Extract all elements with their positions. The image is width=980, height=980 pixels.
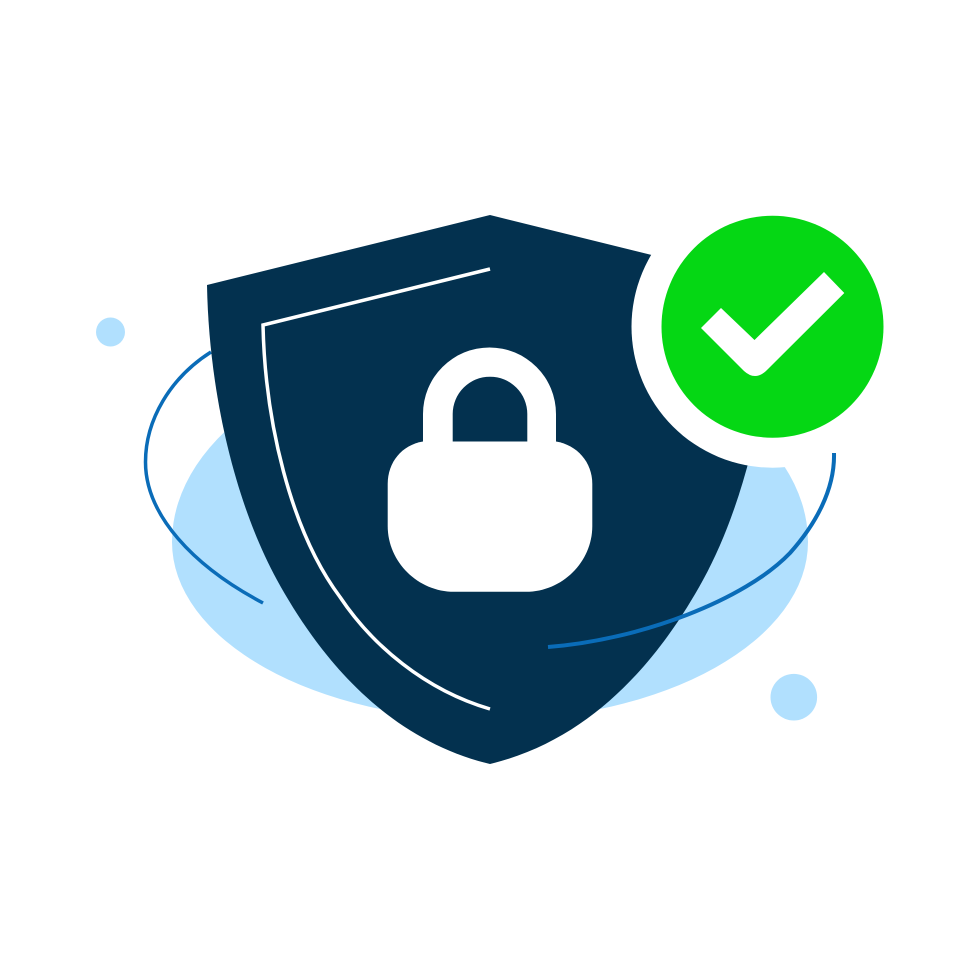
decorative dot: top left xyxy=(96,318,125,346)
icon: padlock xyxy=(388,348,592,592)
badge white ring xyxy=(632,186,914,468)
icon: check mark xyxy=(701,272,844,376)
shield inner highlight xyxy=(263,269,490,709)
orbit arc: right xyxy=(548,453,834,647)
padlock body xyxy=(388,442,592,592)
shield xyxy=(207,215,773,764)
decorative dot: bottom right xyxy=(770,674,817,720)
background blob xyxy=(172,342,808,720)
orbit arc: left xyxy=(146,352,263,603)
padlock shackle xyxy=(423,348,556,448)
badge green circle xyxy=(662,216,884,438)
